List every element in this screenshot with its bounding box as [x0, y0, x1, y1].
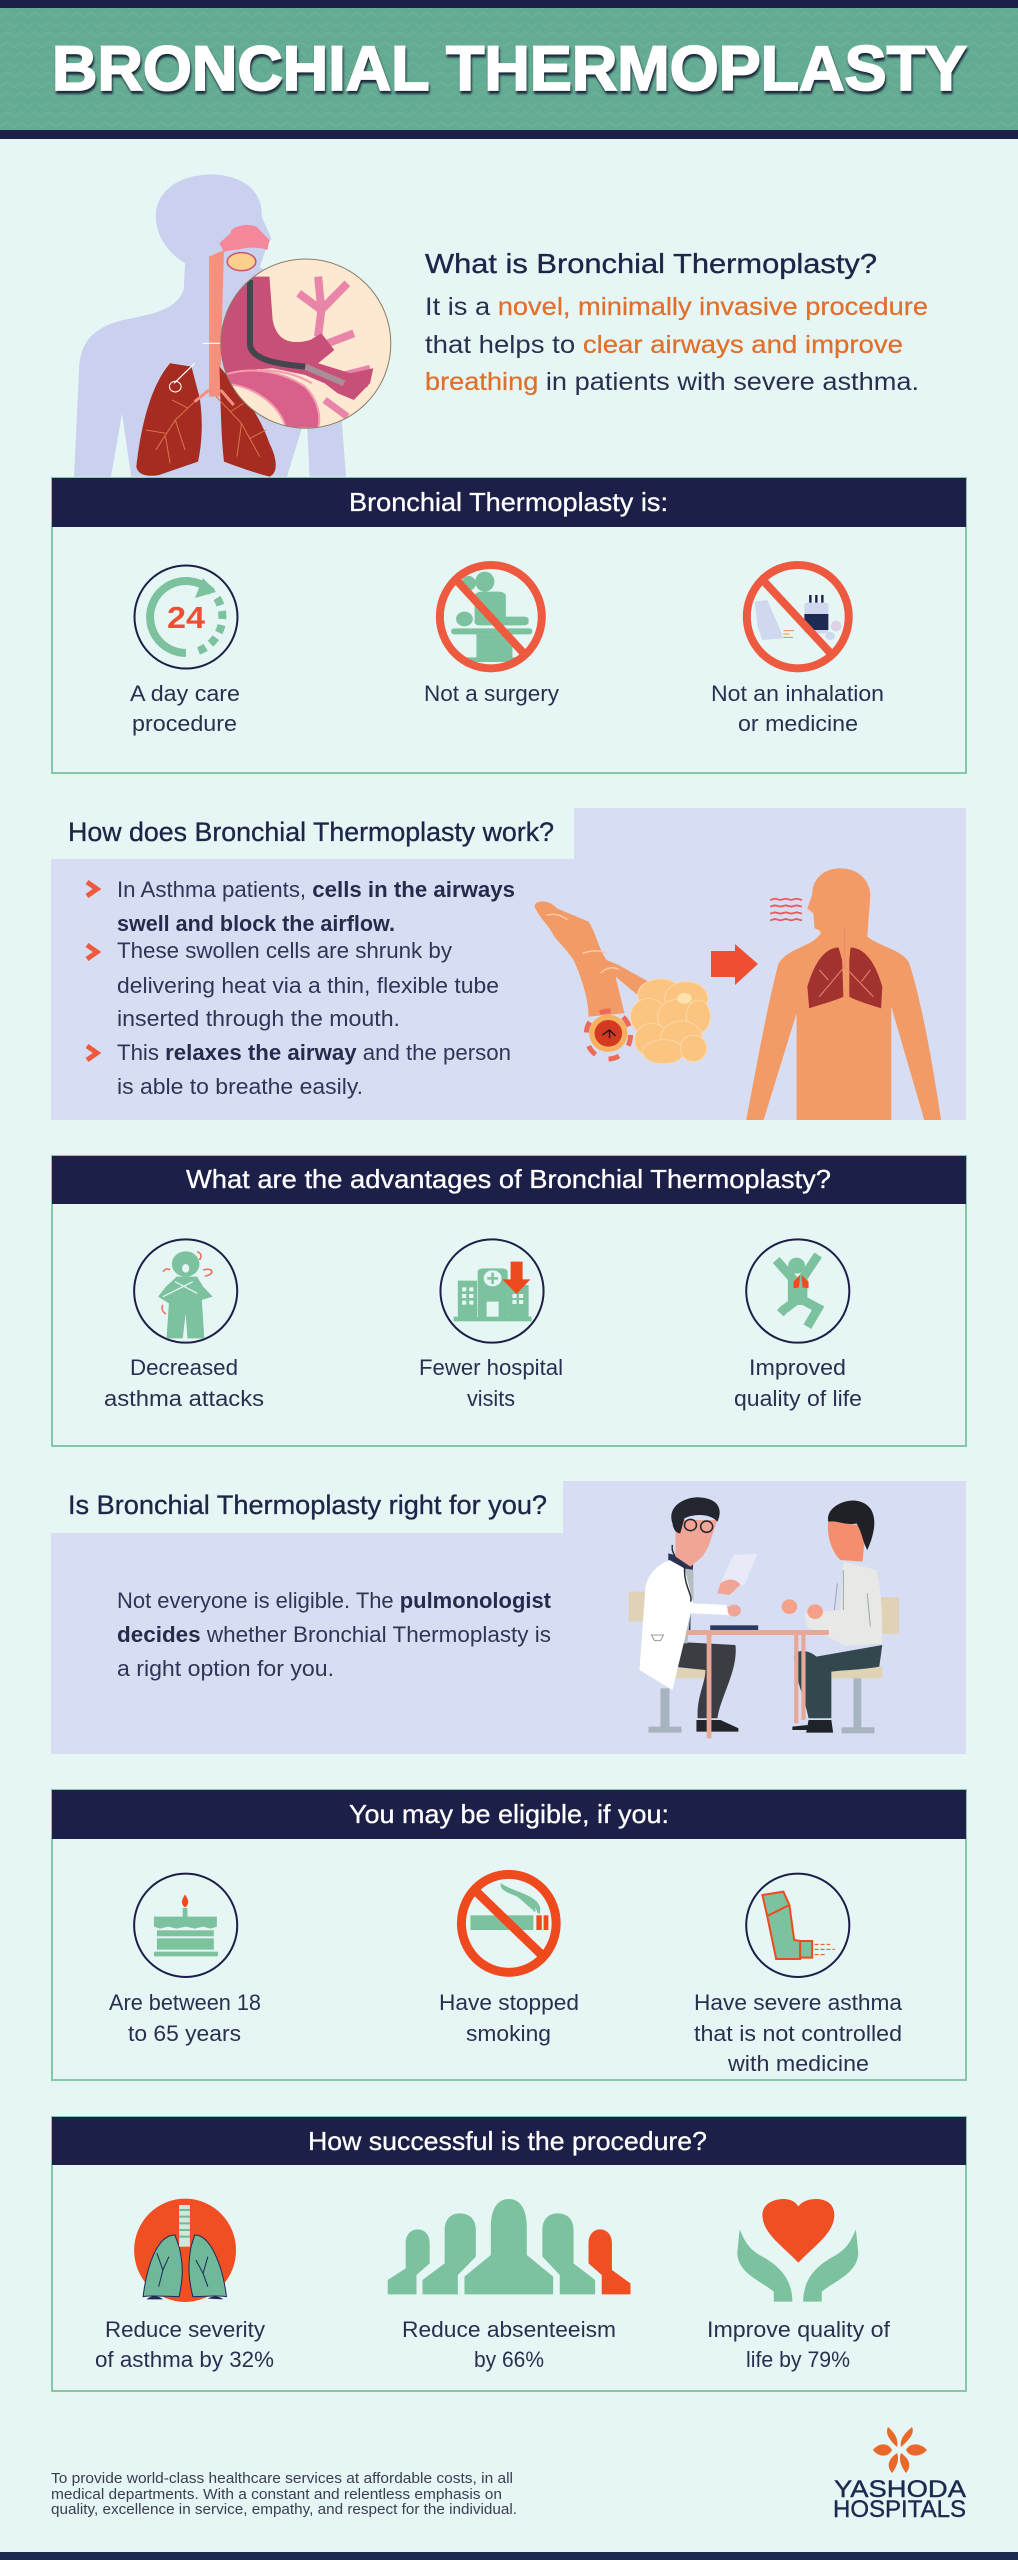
icon: 24 hour day care: 24	[167, 600, 206, 635]
label: that is not controlled	[694, 2021, 902, 2046]
label	[419, 1355, 563, 1411]
label: to 65 years	[128, 2021, 241, 2046]
label	[95, 2317, 274, 2372]
logo: Yashoda Hospitals	[833, 2427, 966, 2523]
footer mission text	[51, 2470, 517, 2518]
label: Improved	[749, 1355, 846, 1380]
bullet list	[87, 877, 515, 1099]
bullet list: is able to breathe easily.	[117, 1074, 363, 1099]
intro text	[425, 248, 928, 396]
paragraph: Not everyone is eligible. The pulmonologist	[117, 1588, 551, 1613]
label: Are between 18	[109, 1990, 261, 2015]
icon: no smoking	[461, 1874, 556, 1972]
label: Not an inhalation	[711, 681, 884, 706]
heading: Is Bronchial Thermoplasty right for you?	[68, 1490, 547, 1520]
illustration: doctor and patient at table	[629, 1497, 899, 1738]
label: with medicine	[727, 2051, 869, 2076]
label: Decreased	[130, 1355, 238, 1380]
label: procedure	[132, 711, 237, 736]
label	[694, 1990, 902, 2076]
label	[711, 681, 884, 736]
label: visits	[467, 1386, 515, 1411]
icon: fewer hospital visits	[440, 1239, 544, 1343]
illustration: person breathing	[746, 868, 941, 1120]
label: A day care	[130, 681, 240, 706]
label	[130, 681, 240, 736]
intro heading: What is Bronchial Thermoplasty?	[425, 248, 877, 279]
paragraph: decides whether Bronchial Thermoplasty is	[117, 1622, 551, 1647]
intro paragraph	[425, 293, 928, 396]
icon: birthday cake	[134, 1874, 237, 1977]
logo: Yashoda Hospitals: HOSPITALS	[833, 2496, 966, 2523]
label: by 66%	[474, 2347, 544, 2372]
footer mission text: quality, excellence in service, empathy, and respect for the individual.	[51, 2501, 517, 2518]
label: Reduce absenteeism	[402, 2317, 616, 2342]
label	[104, 1355, 264, 1411]
label	[402, 2317, 616, 2372]
label: Improve quality of	[707, 2317, 891, 2342]
heading: How successful is the procedure?	[308, 2126, 707, 2156]
label: quality of life	[734, 1386, 862, 1411]
bullet list: swell and block the airflow.	[117, 911, 395, 936]
heading: You may be eligible, if you:	[349, 1799, 669, 1829]
label: Have stopped	[439, 1990, 579, 2015]
bullet list: inserted through the mouth.	[117, 1006, 400, 1031]
icon: not a surgery	[440, 565, 542, 668]
panel heading: Bronchial Thermoplasty is:	[349, 487, 668, 517]
paragraph	[117, 1588, 551, 1681]
bullet list: In Asthma patients, cells in the airways	[117, 877, 515, 902]
paragraph: a right option for you.	[117, 1656, 334, 1681]
icon: heart in hands	[737, 2199, 858, 2302]
illustration: swollen bronchus and alveoli	[535, 901, 710, 1064]
heading: What are the advantages of Bronchial Thermoplasty?	[186, 1164, 831, 1194]
bullet list: These swollen cells are shrunk by	[117, 938, 453, 963]
label	[734, 1355, 862, 1411]
label	[707, 2317, 891, 2372]
bullet list: delivering heat via a thin, flexible tube	[117, 973, 499, 998]
panel: is it right for you	[51, 1481, 966, 1754]
label: life by 79%	[746, 2347, 850, 2372]
footer mission text: medical departments. With a constant and relentless emphasis on	[51, 2486, 502, 2503]
heading: How does Bronchial Thermoplasty work?	[68, 817, 554, 847]
icon: group of people	[388, 2199, 631, 2294]
panel: eligibility	[52, 1790, 966, 2080]
label: Not a surgery	[424, 681, 560, 706]
panel: Bronchial Thermoplasty is	[52, 478, 966, 773]
panel: how does it work	[51, 808, 966, 1120]
label: Fewer hospital	[419, 1355, 563, 1380]
bullet list: This relaxes the airway and the person	[117, 1040, 511, 1065]
intro paragraph: that helps to clear airways and improve	[425, 331, 903, 359]
icon: 24 hour day care	[134, 566, 238, 668]
panel: success	[52, 2117, 966, 2391]
label: or medicine	[738, 711, 858, 736]
footer mission text: To provide world-class healthcare services at affordable costs, in all	[51, 2470, 513, 2487]
label	[439, 1990, 579, 2046]
header banner	[0, 0, 1018, 139]
arrow	[711, 944, 758, 985]
intro paragraph: breathing in patients with severe asthma.	[425, 368, 919, 396]
label: of asthma by 32%	[95, 2347, 274, 2372]
label: asthma attacks	[104, 1386, 264, 1411]
label: smoking	[466, 2021, 551, 2046]
icon: decreased asthma attacks	[134, 1239, 237, 1343]
label: Reduce severity	[105, 2317, 266, 2342]
icon: inhaler	[746, 1874, 849, 1977]
icon: improved quality of life	[746, 1239, 849, 1343]
intro paragraph: It is a novel, minimally invasive procedure	[425, 293, 928, 321]
label	[109, 1990, 261, 2046]
label: Have severe asthma	[694, 1990, 902, 2015]
icon: not an inhalation or medicine	[747, 565, 849, 668]
title: BRONCHIAL THERMOPLASTY	[52, 34, 967, 104]
logo: Yashoda Hospitals: YASHODA	[834, 2476, 966, 2503]
icon: lungs	[134, 2199, 236, 2302]
illustration: airway and lungs with zoomed bronchi inset	[74, 174, 391, 477]
panel: advantages	[52, 1156, 966, 1446]
